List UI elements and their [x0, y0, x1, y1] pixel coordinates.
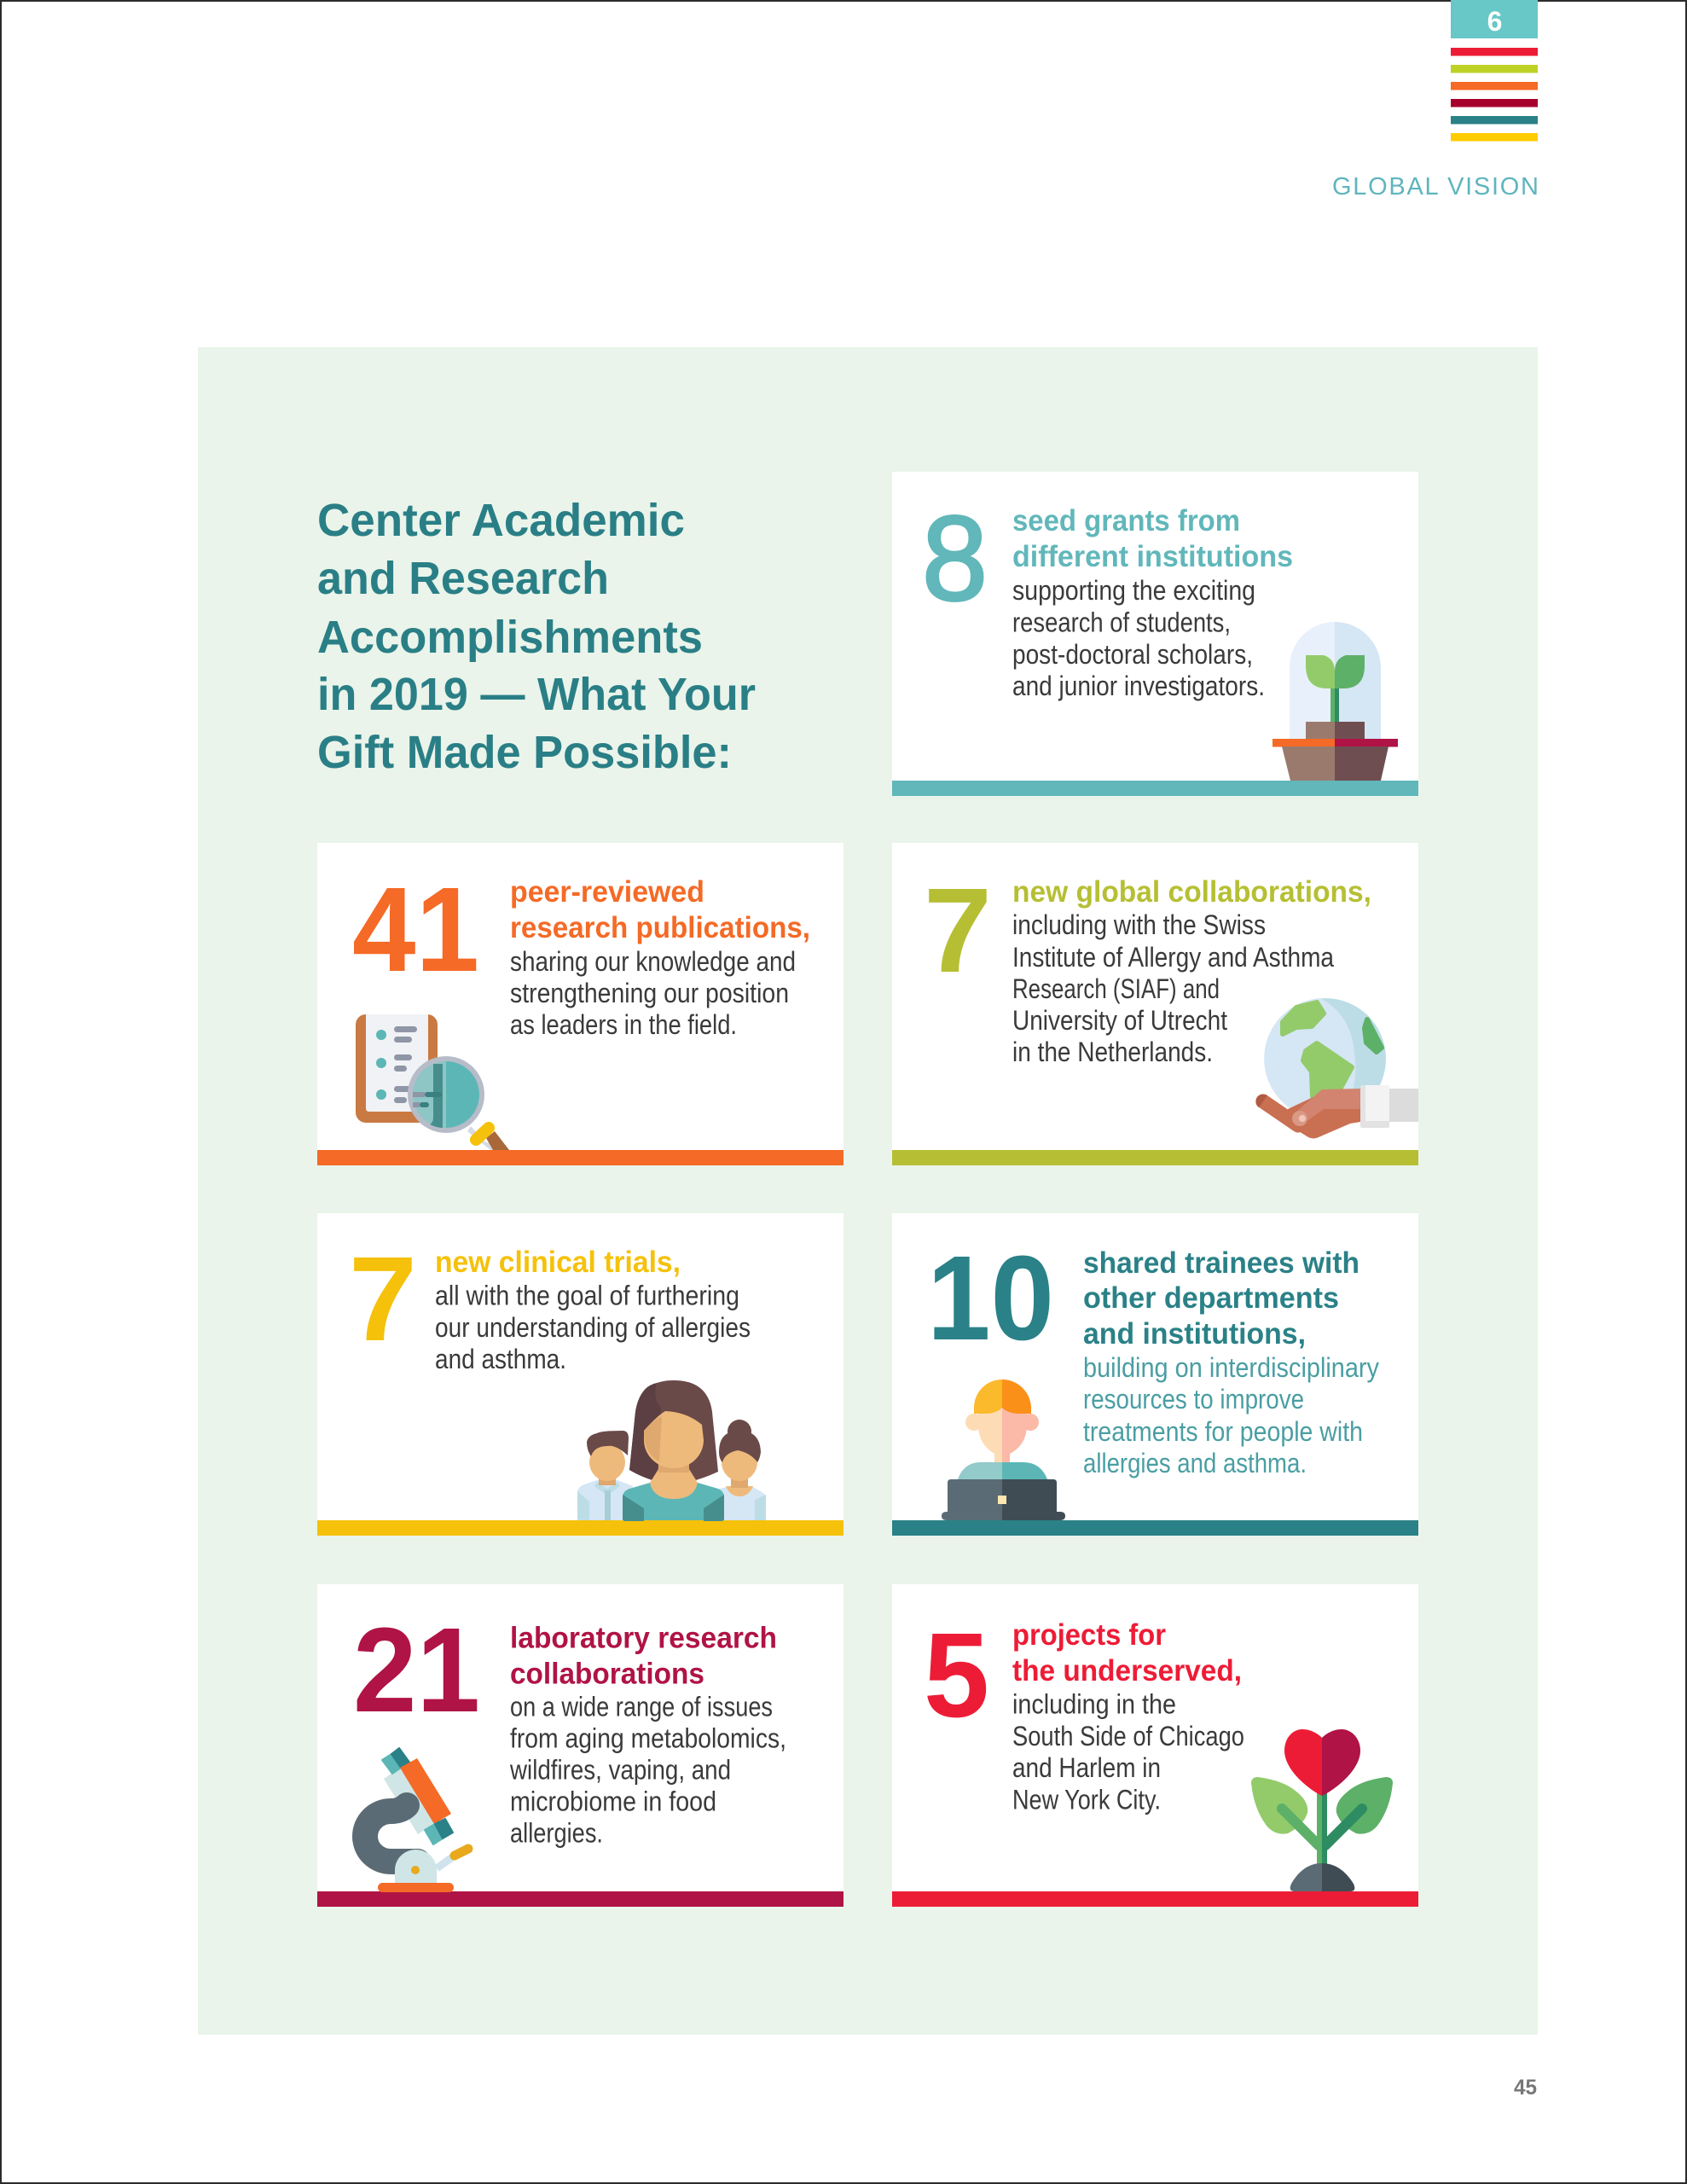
icon: hand holding globe — [1255, 998, 1418, 1138]
heading: publications — [510, 875, 810, 944]
body text: global collaborations: in the Netherlands. — [1012, 1037, 1213, 1067]
title: Center Academic — [317, 495, 685, 546]
heading: shared trainees: shared trainees with — [1083, 1246, 1359, 1280]
body text: laboratory collaborations: microbiome in food — [510, 1786, 716, 1817]
body text: shared trainees: building on interdisciplinary — [1083, 1352, 1379, 1383]
number 5: 5 — [924, 1607, 989, 1742]
panel: seed grants card — [892, 472, 1418, 796]
body text: clinical trials: all with the goal of furthering — [435, 1280, 739, 1310]
heading: laboratory collaborations — [510, 1621, 777, 1691]
title: in 2019 — What Your — [317, 669, 756, 720]
body text: seed grants — [1012, 575, 1265, 701]
icon: person at laptop — [942, 1380, 1065, 1520]
body text: shared trainees: treatments for people with — [1083, 1416, 1363, 1447]
body text: global collaborations: University of Utrecht — [1012, 1005, 1227, 1036]
heading: underserved projects — [1012, 1618, 1242, 1687]
section tab with number 6 and color stripes: 6 — [1487, 6, 1502, 37]
body text: laboratory collaborations: from aging metabolomics, — [510, 1723, 786, 1754]
panel: global collaborations card — [892, 843, 1418, 1165]
icon: heart plant — [1251, 1729, 1393, 1891]
body text: publications — [510, 946, 796, 1040]
number 21: 21 — [353, 1602, 480, 1737]
heading: laboratory collaborations: laboratory research — [510, 1621, 777, 1655]
number 7: 7 — [924, 863, 992, 997]
body text: shared trainees: resources to improve — [1083, 1384, 1304, 1414]
title: Accomplishments — [317, 612, 703, 663]
body text: seed grants: and junior investigators. — [1012, 671, 1265, 701]
heading: shared trainees: and institutions, — [1083, 1317, 1306, 1350]
page number: 45 — [1514, 2076, 1537, 2100]
heading: underserved projects: projects for — [1012, 1618, 1166, 1652]
number 41: 41 — [352, 862, 479, 996]
panel: publications card — [317, 843, 844, 1165]
body text: publications: sharing our knowledge and — [510, 946, 796, 977]
body text: global collaborations: Research (SIAF) and — [1012, 973, 1220, 1004]
body text: clinical trials: our understanding of allergies — [435, 1312, 751, 1343]
icon: microscope — [365, 1748, 468, 1892]
panel: underserved projects card — [892, 1584, 1418, 1907]
heading: seed grants: seed grants from — [1012, 504, 1240, 537]
heading: clinical trials: new clinical trials, — [435, 1246, 681, 1279]
heading: global collaborations: new global collaborations, — [1012, 875, 1371, 909]
heading: shared trainees — [1083, 1246, 1359, 1350]
panel: accomplishments background — [198, 347, 1538, 2035]
body text: laboratory collaborations: on a wide range of issues — [510, 1691, 773, 1722]
body text: clinical trials: and asthma. — [435, 1344, 566, 1374]
heading: shared trainees: other departments — [1083, 1281, 1339, 1315]
body text: seed grants: post-doctoral scholars, — [1012, 639, 1253, 670]
body text: global collaborations: including with the Swiss — [1012, 909, 1266, 940]
number 10: 10 — [927, 1230, 1054, 1365]
heading: seed grants — [1012, 504, 1293, 573]
body text: laboratory collaborations — [509, 1691, 786, 1848]
title: Gift Made Possible: — [317, 727, 732, 778]
body text: underserved projects: New York City. — [1012, 1785, 1161, 1815]
body text: clinical trials — [435, 1280, 751, 1374]
body text: underserved projects — [1012, 1689, 1244, 1815]
heading: underserved projects: the underserved, — [1012, 1654, 1242, 1687]
panel: shared trainees card — [892, 1213, 1418, 1536]
body text: global collaborations: Institute of Allergy and Asthma — [1012, 942, 1334, 973]
body text: global collaborations — [1012, 909, 1334, 1067]
body text: underserved projects: and Harlem in — [1012, 1752, 1161, 1783]
body text: laboratory collaborations: wildfires, vaping, and — [509, 1754, 731, 1785]
body text: underserved projects: including in the — [1012, 1689, 1176, 1720]
section label: global vision: GLOBAL VISION — [1332, 173, 1539, 200]
title: and Research — [317, 553, 609, 604]
title — [317, 495, 756, 778]
icon: three people — [577, 1380, 766, 1521]
heading: publications: peer-reviewed — [510, 875, 704, 909]
number 8: 8 — [922, 491, 988, 625]
body text: publications: strengthening our position — [510, 978, 789, 1008]
body text: seed grants: supporting the exciting — [1012, 575, 1255, 606]
heading: seed grants: different institutions — [1012, 540, 1293, 573]
heading: laboratory collaborations: collaborations — [510, 1657, 704, 1691]
body text: shared trainees: allergies and asthma. — [1083, 1448, 1307, 1478]
body text: publications: as leaders in the field. — [510, 1009, 737, 1040]
number 7: 7 — [349, 1231, 417, 1366]
icon: seedling under glass dome — [1272, 622, 1398, 781]
heading: publications: research publications, — [510, 911, 810, 944]
icon: clipboard and magnifying glass — [356, 1014, 509, 1150]
panel: laboratory collaborations card — [317, 1584, 844, 1907]
panel: clinical trials card — [317, 1213, 844, 1536]
body text: underserved projects: South Side of Chicago — [1012, 1721, 1244, 1751]
body text: laboratory collaborations: allergies. — [510, 1817, 603, 1848]
body text: shared trainees — [1083, 1352, 1379, 1478]
section tab with number 6 and color stripes — [1451, 0, 1538, 142]
body text: seed grants: research of students, — [1012, 607, 1231, 638]
